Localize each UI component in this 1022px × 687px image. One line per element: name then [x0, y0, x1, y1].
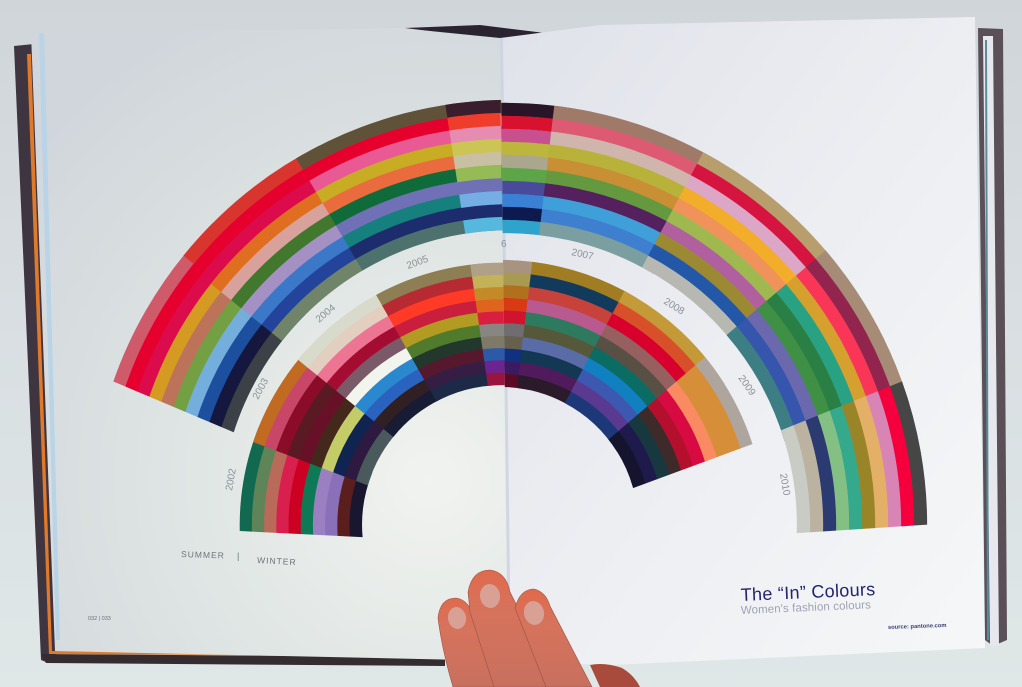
right half of outer ring — [501, 102, 928, 534]
page numbers: 032 | 033 — [88, 616, 111, 622]
hand — [438, 570, 640, 687]
left page — [31, 28, 510, 661]
wedge: 2009 outer — [726, 250, 910, 442]
wedge: 2006 inner left — [470, 262, 505, 386]
wedge: 2003 inner — [253, 350, 398, 486]
left half of inner ring — [240, 262, 505, 538]
label: 2007: 2007 — [570, 247, 595, 263]
colour arch — [113, 100, 928, 538]
wedge: 2006 inner right — [503, 260, 555, 390]
thumb — [590, 664, 640, 687]
nails — [446, 583, 546, 630]
wedge: 2008 inner — [559, 297, 736, 448]
finger: right — [515, 589, 592, 687]
wedge: 2004 inner — [303, 280, 438, 442]
label: 2004: 2004 — [314, 302, 338, 325]
label: 2002: 2002 — [224, 467, 239, 492]
wedge: 2006 outer left — [445, 100, 502, 234]
wedge: 2004 outer — [184, 146, 388, 341]
year labels — [224, 239, 792, 497]
wedge: 2002 — [240, 426, 372, 538]
label: 2003: 2003 — [251, 376, 271, 401]
wedge: 2007 inner — [516, 268, 636, 401]
legend: summer / winter: | — [237, 551, 240, 561]
legend: summer / winter: WINTER — [257, 555, 297, 567]
finger: middle — [468, 570, 546, 687]
subtitle: Women's fashion colours — [741, 599, 871, 617]
legend: summer / winter: SUMMER — [181, 549, 225, 561]
wedge: 2005 outer — [296, 100, 502, 270]
left page edge tint — [39, 33, 60, 640]
left half of outer ring — [113, 100, 502, 432]
wedge: 2007 outer — [537, 112, 721, 268]
legend: summer / winter — [181, 549, 297, 567]
wedge: 2008 outer — [633, 158, 849, 341]
wedge: 2006 outer right — [501, 102, 593, 240]
wedge: 2010 outer — [781, 382, 928, 534]
spine fold — [500, 38, 511, 662]
label: 2005: 2005 — [405, 254, 430, 272]
right half of inner ring — [503, 260, 752, 488]
label: 2009: 2009 — [736, 373, 758, 398]
finger: left — [438, 598, 496, 687]
wedge: 2009 inner — [608, 357, 752, 488]
wedge: 2005 inner — [376, 263, 492, 402]
title: The “In” Colours — [740, 579, 876, 605]
label: 2006 fragment: 6 — [501, 239, 507, 250]
source: source: pantone.com — [888, 623, 947, 631]
right page — [500, 17, 985, 665]
label: 2010: 2010 — [777, 473, 792, 497]
label: 2008: 2008 — [661, 296, 686, 318]
wedge: 2003 outer — [113, 118, 450, 432]
